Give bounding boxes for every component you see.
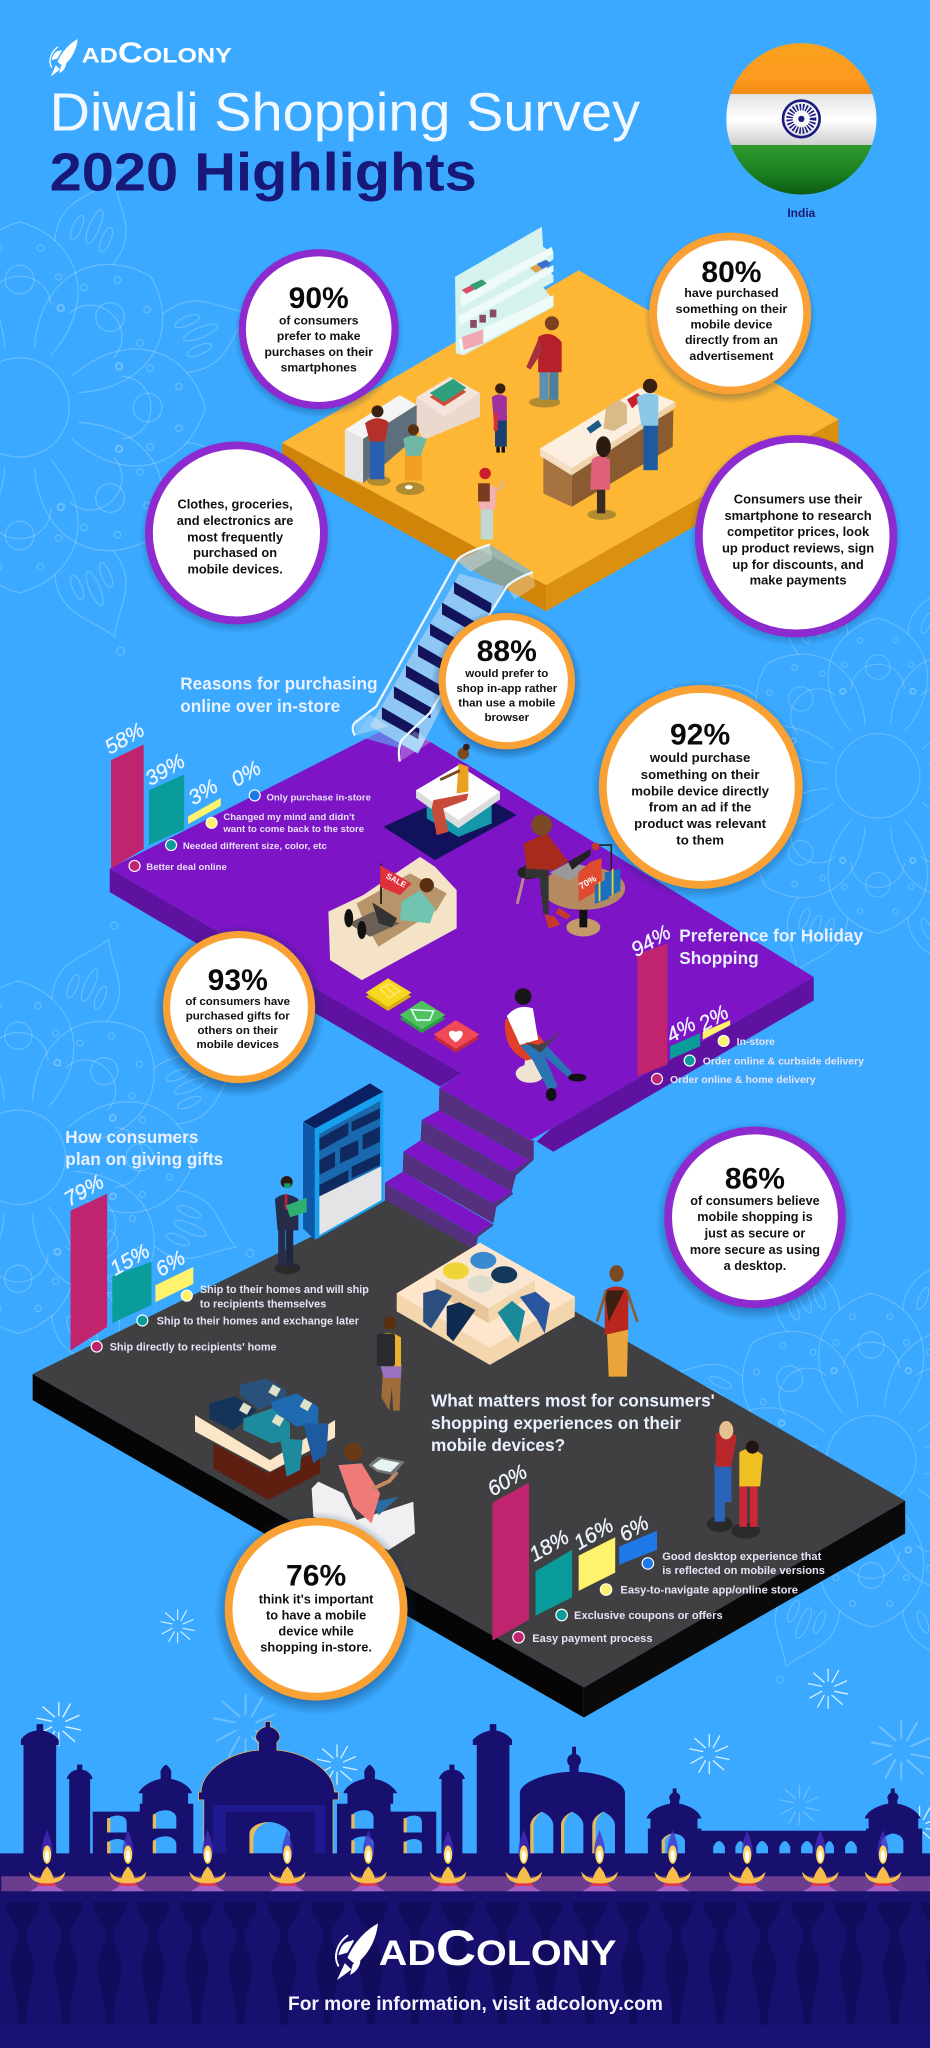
chart: what matters most: Good desktop experience that — [662, 1551, 822, 1563]
chart: how consumers plan on giving gifts: 15% — [106, 1240, 154, 1280]
bubble: 90 percent: prefer to make — [277, 329, 361, 343]
man in suit reading — [274, 1176, 307, 1274]
bubble: 80 percent: directly from an — [685, 333, 778, 347]
orange platform — [282, 270, 839, 611]
bubble: 90 percent: smartphones — [281, 361, 357, 375]
chart: how consumers plan on giving gifts: Ship directly to recipients' home — [110, 1342, 277, 1354]
chart: how consumers plan on giving gifts — [60, 1127, 369, 1354]
bubble: clothes groceries electronics: most frequently — [187, 529, 284, 544]
bubble: 92 percent: mobile device directly — [631, 783, 770, 798]
bubble: 88 percent: shop in-app rather — [456, 683, 558, 695]
chart: reasons for purchasing online: 58% — [101, 718, 149, 759]
chart: what matters most: Easy-to-navigate app/online store — [620, 1584, 798, 1596]
man in armchair with tablet — [312, 1443, 415, 1550]
chart: how consumers plan on giving gifts: 79% — [60, 1170, 108, 1211]
bubble: 80 percent — [644, 231, 816, 404]
heading — [180, 674, 378, 716]
chart: what matters most — [431, 1391, 825, 1645]
bubble: 86 percent: more secure as using — [690, 1243, 820, 1257]
woman sitting on ottoman — [383, 744, 517, 860]
dark platform — [33, 1200, 905, 1718]
chart: reasons for purchasing online: 39% — [141, 750, 189, 791]
footer logo: ADCOLONY — [379, 1920, 617, 1976]
bubble: 86 percent: mobile shopping is — [697, 1210, 813, 1224]
chart: reasons for purchasing online: Better deal online — [146, 862, 227, 873]
chart: preference for holiday shopping — [627, 921, 864, 1086]
bubble: clothes groceries electronics — [140, 440, 333, 633]
chart: preference for holiday shopping: In-store — [737, 1037, 775, 1048]
bubble: 93 percent: 93% — [208, 964, 268, 997]
bubble: clothes groceries electronics: and electronics are — [177, 513, 293, 528]
bubble: 90 percent: purchases on their — [264, 345, 373, 359]
wall shelf — [455, 227, 553, 355]
bubble: 93 percent: mobile devices — [197, 1039, 279, 1051]
footer call to action: For more information, visit adcolony.com — [288, 1994, 663, 2015]
bubble: 80 percent: advertisement — [689, 349, 773, 363]
bubble: 93 percent — [153, 925, 325, 1097]
bubble: 93 percent: of consumers have — [185, 996, 290, 1008]
heading: shopping experiences on their — [431, 1413, 681, 1433]
chart: preference for holiday shopping: Order online & home delivery — [670, 1075, 816, 1086]
bubble: 76 percent: 76% — [286, 1560, 346, 1593]
bubble: 88 percent: would prefer to — [464, 668, 548, 680]
bubble: 88 percent: 88% — [477, 635, 537, 668]
blue bookcase — [303, 1083, 383, 1240]
chart: what matters most: 6% — [615, 1512, 653, 1547]
chart: reasons for purchasing online: Changed my mind and didn't — [223, 812, 355, 823]
chart: what matters most: 16% — [570, 1514, 618, 1555]
clothing display table — [397, 1243, 575, 1365]
sale sofa and man on laptop — [328, 857, 457, 980]
chart: what matters most: Exclusive coupons or offers — [574, 1610, 723, 1622]
title: 2020 Highlights — [50, 144, 477, 203]
heading: plan on giving gifts — [65, 1149, 223, 1169]
bubble: consumers use smartphone: make payments — [750, 572, 847, 587]
chart: reasons for purchasing online: Needed different size, color, etc — [183, 841, 327, 852]
skyline windows — [107, 1805, 903, 1855]
bubble: consumers use smartphone: smartphone to research — [724, 508, 872, 523]
chart: what matters most: 60% — [484, 1460, 531, 1501]
india flag — [726, 43, 878, 220]
chart: reasons for purchasing online — [101, 674, 378, 873]
chart: what matters most: is reflected on mobile versions — [662, 1565, 825, 1577]
chart: how consumers plan on giving gifts: Ship to their homes and will ship — [200, 1284, 369, 1296]
bubble: 92 percent: something on their — [641, 767, 759, 782]
bubble: 90 percent: of consumers — [279, 314, 359, 328]
bubble: 80 percent: something on their — [676, 302, 787, 316]
heading: Shopping — [679, 948, 759, 968]
bubble: 92 percent: would purchase — [649, 750, 750, 765]
bubble: 76 percent: shopping in-store. — [260, 1640, 372, 1655]
couple talking — [707, 1421, 763, 1539]
sale sofa and man on laptop: SALE — [384, 872, 408, 890]
bubble: 76 percent: device while — [278, 1623, 354, 1638]
title — [50, 84, 640, 203]
bubble: 86 percent: just as secure or — [704, 1227, 805, 1241]
chart: what matters most: Easy payment process — [532, 1633, 653, 1645]
chart: preference for holiday shopping: 4% — [662, 1013, 700, 1048]
bubble: 92 percent: product was relevant — [634, 816, 767, 831]
bubble: consumers use smartphone: competitor prices, look — [727, 524, 870, 539]
chart: reasons for purchasing online: 0% — [227, 757, 265, 792]
heading: mobile devices? — [431, 1435, 565, 1455]
bubble: 92 percent: to them — [676, 832, 724, 847]
bubble: clothes groceries electronics: mobile devices. — [187, 561, 283, 576]
person with backpack — [377, 1316, 402, 1411]
heading — [65, 1127, 223, 1169]
bubble: consumers use smartphone: up for discounts, and — [732, 557, 864, 572]
bubble: 80 percent: have purchased — [684, 286, 779, 300]
india flag: India — [787, 206, 816, 220]
bubble: 93 percent: purchased gifts for — [186, 1010, 290, 1022]
chart: preference for holiday shopping: Order online & curbside delivery — [703, 1056, 864, 1067]
chart: preference for holiday shopping: 2% — [694, 1001, 733, 1036]
bubble: 76 percent: to have a mobile — [266, 1608, 366, 1623]
bubble: 86 percent: of consumers believe — [690, 1194, 820, 1208]
bubble: 88 percent: than use a mobile — [458, 698, 555, 710]
purple stairs — [385, 1088, 534, 1250]
bubble: clothes groceries electronics: Clothes, groceries, — [178, 497, 293, 512]
bubble: 92 percent — [590, 680, 810, 900]
heading: How consumers — [65, 1127, 198, 1147]
heading: online over in-store — [180, 696, 340, 716]
diya lamps — [29, 1830, 901, 1891]
chart: reasons for purchasing online: want to come back to the store — [222, 824, 364, 835]
chart: how consumers plan on giving gifts: 6% — [152, 1246, 189, 1281]
bubble: 93 percent: others on their — [198, 1025, 278, 1037]
heading — [431, 1391, 715, 1455]
ground and footer band — [0, 1853, 930, 2048]
bubble: 92 percent: 92% — [670, 718, 730, 751]
towers — [21, 1724, 512, 1855]
bubble: consumers use smartphone: up product reviews, sign — [722, 540, 874, 555]
woman at cafe table: 70% — [577, 873, 598, 891]
logo: AD C OLONY — [82, 38, 232, 70]
left clothing table — [195, 1378, 335, 1500]
title: Diwali Shopping Survey — [50, 84, 640, 143]
bubble: consumers use smartphone — [688, 432, 903, 647]
books table and cabinet with shoppers — [345, 377, 480, 495]
service counter and two shoppers — [540, 379, 675, 520]
bubble: 80 percent: 80% — [701, 256, 762, 289]
bubble: 86 percent: 86% — [725, 1163, 785, 1196]
chart: preference for holiday shopping: 94% — [627, 921, 675, 962]
man in egg chair with laptop — [505, 988, 586, 1101]
bubble: 88 percent: browser — [484, 712, 530, 724]
bubble: clothes groceries electronics: purchased on — [193, 545, 277, 560]
app icons — [366, 978, 479, 1053]
chart: how consumers plan on giving gifts: to recipients themselves — [200, 1298, 326, 1310]
bubble: 80 percent: mobile device — [690, 317, 773, 331]
woman in saree — [597, 1265, 637, 1377]
bubble: 92 percent: from an ad if the — [649, 800, 751, 815]
logo — [50, 38, 232, 76]
blue staircase — [353, 545, 536, 761]
bubble: 90 percent — [234, 248, 404, 418]
bubble: 86 percent — [656, 1122, 854, 1320]
woman with backpack — [478, 468, 503, 539]
man in red sweater — [526, 316, 562, 408]
bubble: 88 percent — [431, 609, 583, 760]
heading: Preference for Holiday — [679, 926, 864, 946]
chart: reasons for purchasing online: 3% — [184, 775, 222, 810]
woman at cafe table — [517, 815, 625, 936]
bubble: 86 percent: a desktop. — [724, 1259, 786, 1273]
heading: What matters most for consumers' — [431, 1391, 715, 1411]
chart: how consumers plan on giving gifts: Ship to their homes and exchange later — [157, 1315, 360, 1327]
heading: Reasons for purchasing — [180, 674, 378, 694]
purple platform — [110, 722, 814, 1152]
woman in purple — [492, 383, 507, 453]
skyline silhouette — [21, 1721, 922, 1855]
bubble: 90 percent: 90% — [289, 282, 349, 315]
chart: what matters most: 18% — [525, 1526, 573, 1566]
chart: reasons for purchasing online: Only purchase in-store — [266, 793, 371, 804]
heading — [679, 926, 864, 968]
bubble: 76 percent — [214, 1511, 418, 1715]
bubble: 76 percent: think it's important — [259, 1591, 374, 1606]
bubble: consumers use smartphone: Consumers use their — [734, 492, 862, 507]
